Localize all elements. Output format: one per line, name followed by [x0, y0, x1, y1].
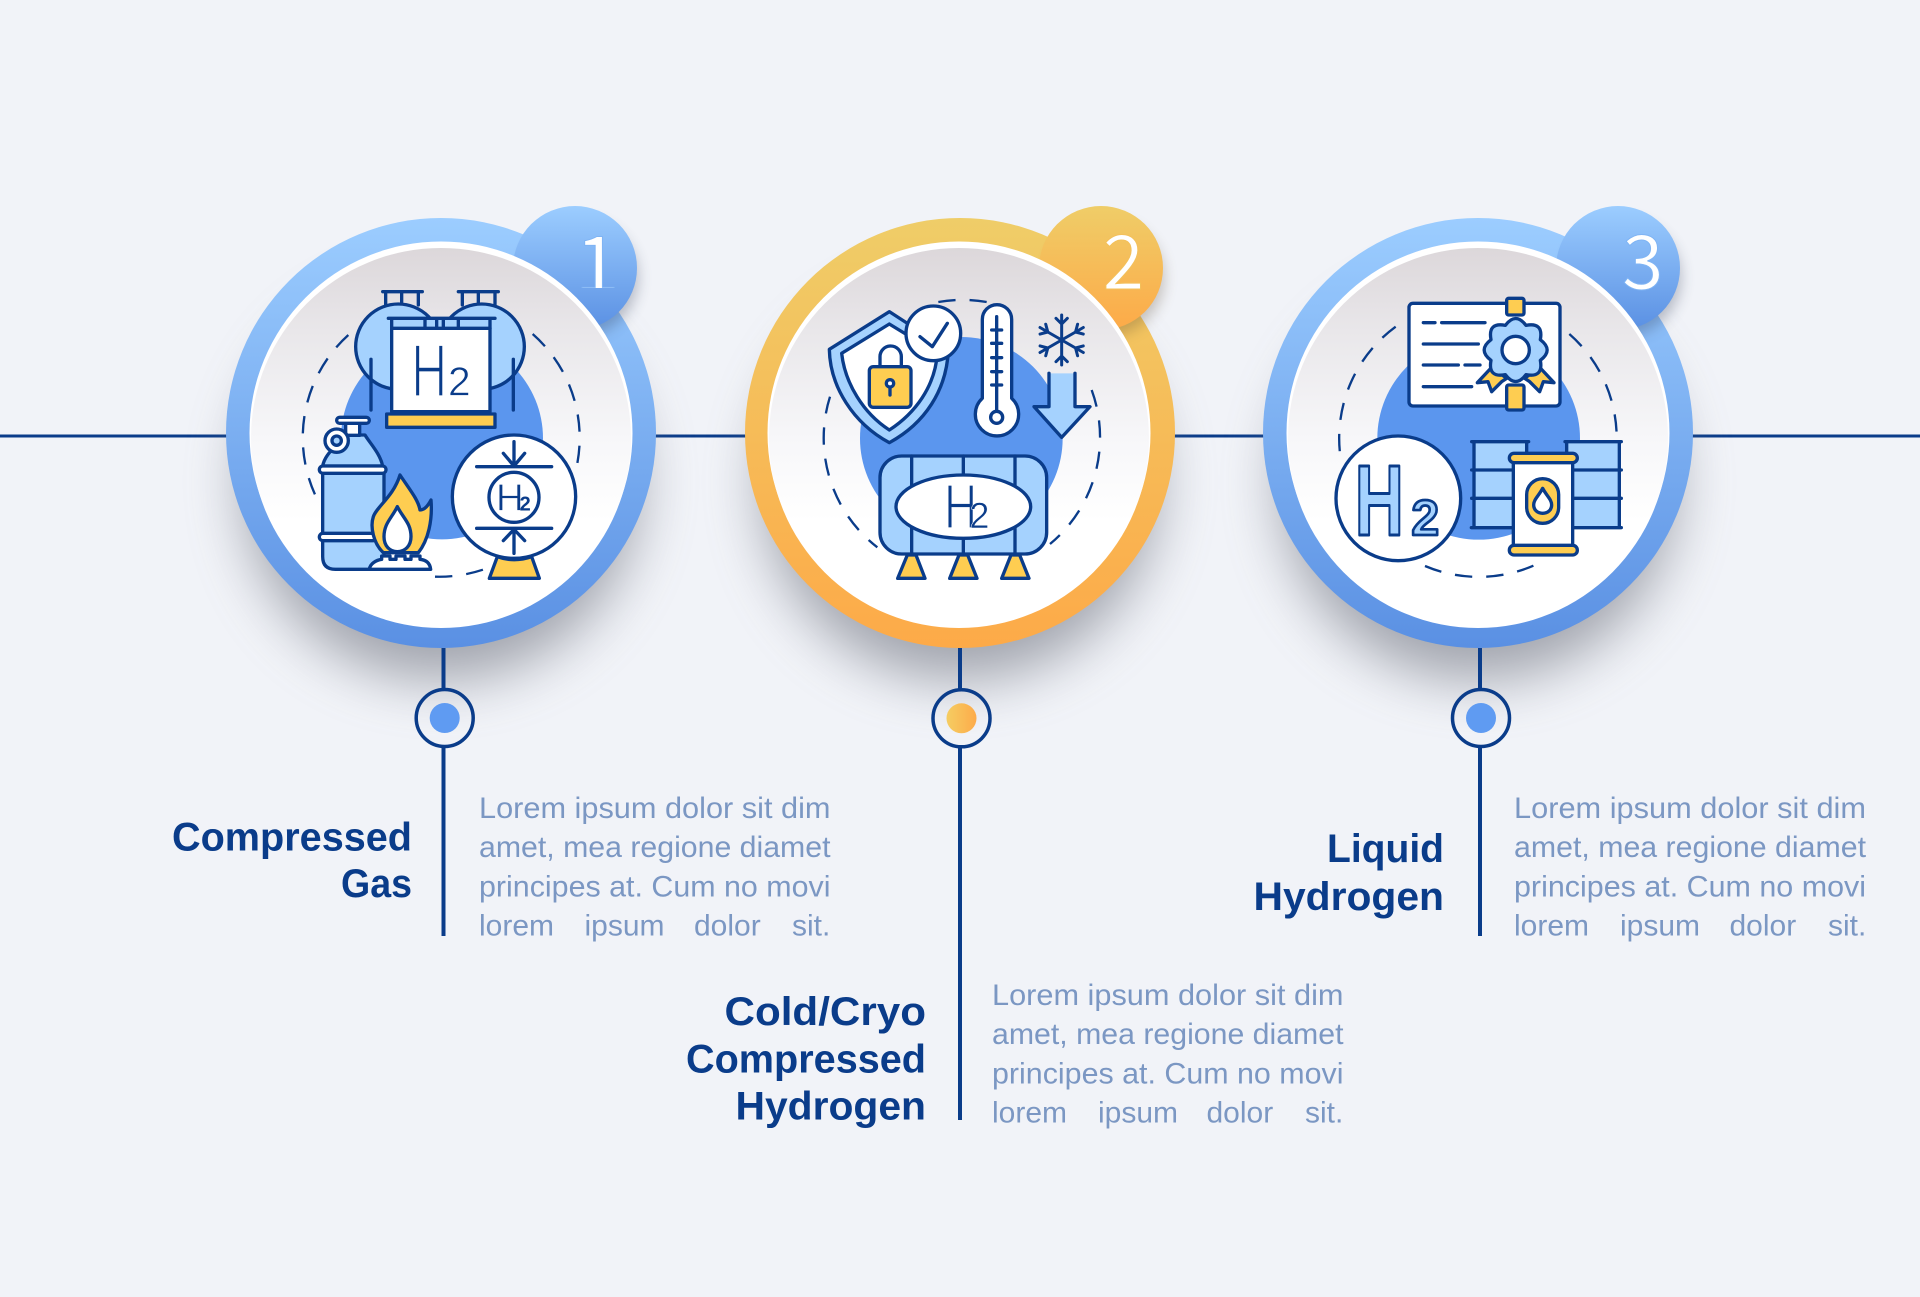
title: Cold/Cryo Compressed Hydrogen: Compressed — [686, 1038, 926, 1082]
body text 2 — [992, 979, 1344, 1130]
body text 1 — [479, 792, 831, 942]
badge 1 — [513, 202, 638, 336]
icon: liquid hydrogen: H — [1355, 446, 1404, 557]
body text 3: sit. — [1828, 910, 1866, 942]
title: Cold/Cryo Compressed Hydrogen — [686, 990, 926, 1128]
body text 2: sit. — [1305, 1096, 1343, 1130]
body text 3: principes at. Cum no movi — [1514, 870, 1866, 904]
badge 3 — [1556, 202, 1681, 336]
body text 3: dolor — [1730, 910, 1796, 942]
body text 2: ipsum — [1098, 1096, 1178, 1130]
outer ring 3 — [1263, 218, 1693, 648]
title: Cold/Cryo Compressed Hydrogen: Hydrogen — [736, 1084, 926, 1128]
horizontal connector line — [0, 434, 1920, 438]
body text 3: lorem — [1514, 910, 1589, 942]
icon: cryo compressed: H — [944, 471, 977, 542]
body text 1: dolor — [694, 910, 761, 942]
drop shadow 1 — [243, 284, 639, 680]
body text 1: ipsum — [584, 910, 665, 942]
badge 1: 1 — [575, 202, 619, 318]
step 1 — [226, 202, 656, 680]
icon: liquid hydrogen: 2 — [1411, 490, 1439, 546]
body text 1: lorem — [479, 910, 554, 942]
body text 2: amet, mea regione diamet — [992, 1018, 1344, 1051]
body text 1: amet, mea regione diamet — [479, 831, 831, 864]
badge 3: 3 — [1622, 202, 1664, 311]
icon: liquid hydrogen — [1336, 298, 1621, 577]
inner disc 2 — [768, 242, 1150, 628]
connector with marker 3 — [1452, 648, 1510, 936]
title: Liquid Hydrogen — [1254, 827, 1444, 919]
icon: cryo compressed — [824, 300, 1100, 578]
drop shadow 3 — [1280, 284, 1676, 680]
body text 3: ipsum — [1620, 910, 1700, 942]
title: Compressed Gas: Compressed — [172, 816, 412, 860]
title: Liquid Hydrogen: Liquid — [1327, 827, 1444, 871]
badge 2: 2 — [1103, 202, 1144, 311]
inner disc 3 — [1286, 242, 1670, 628]
badge 2 — [1039, 202, 1164, 336]
infographic canvas — [0, 206, 1920, 1128]
step 2 — [745, 202, 1175, 680]
connector with marker 1 — [416, 648, 473, 936]
title: Cold/Cryo Compressed Hydrogen: Cold/Cryo — [724, 990, 926, 1034]
body text 1: Lorem ipsum dolor sit dim — [479, 792, 830, 825]
outer ring 1 — [226, 218, 656, 648]
body text 1: principes at. Cum no movi — [479, 870, 830, 904]
step 3 — [1263, 202, 1693, 680]
body text 2: dolor — [1206, 1096, 1273, 1130]
body text 1: sit. — [792, 910, 830, 942]
title: Liquid Hydrogen: Hydrogen — [1254, 875, 1444, 919]
icon: compressed gas: 2 — [448, 359, 471, 405]
body text 2: Lorem ipsum dolor sit dim — [992, 979, 1344, 1012]
icon: compressed gas: H — [411, 328, 447, 413]
body text 3 — [1514, 792, 1867, 942]
connector with marker 2 — [933, 648, 990, 1120]
outer ring 2 — [745, 218, 1175, 648]
body text 2: principes at. Cum no movi — [992, 1058, 1344, 1090]
drop shadow 2 — [762, 284, 1158, 680]
body text 3: Lorem ipsum dolor sit dim — [1514, 792, 1866, 825]
inner disc 1 — [250, 242, 632, 628]
body text 2: lorem — [992, 1096, 1067, 1130]
icon: compressed gas — [303, 292, 580, 578]
body text 3: amet, mea regione diamet — [1514, 831, 1867, 864]
title: Compressed Gas — [172, 816, 412, 906]
title: Compressed Gas: Gas — [341, 862, 412, 906]
icon: compressed gas: H — [496, 476, 524, 519]
icon: cryo compressed: 2 — [969, 495, 989, 536]
icon: compressed gas: 2 — [520, 494, 531, 516]
